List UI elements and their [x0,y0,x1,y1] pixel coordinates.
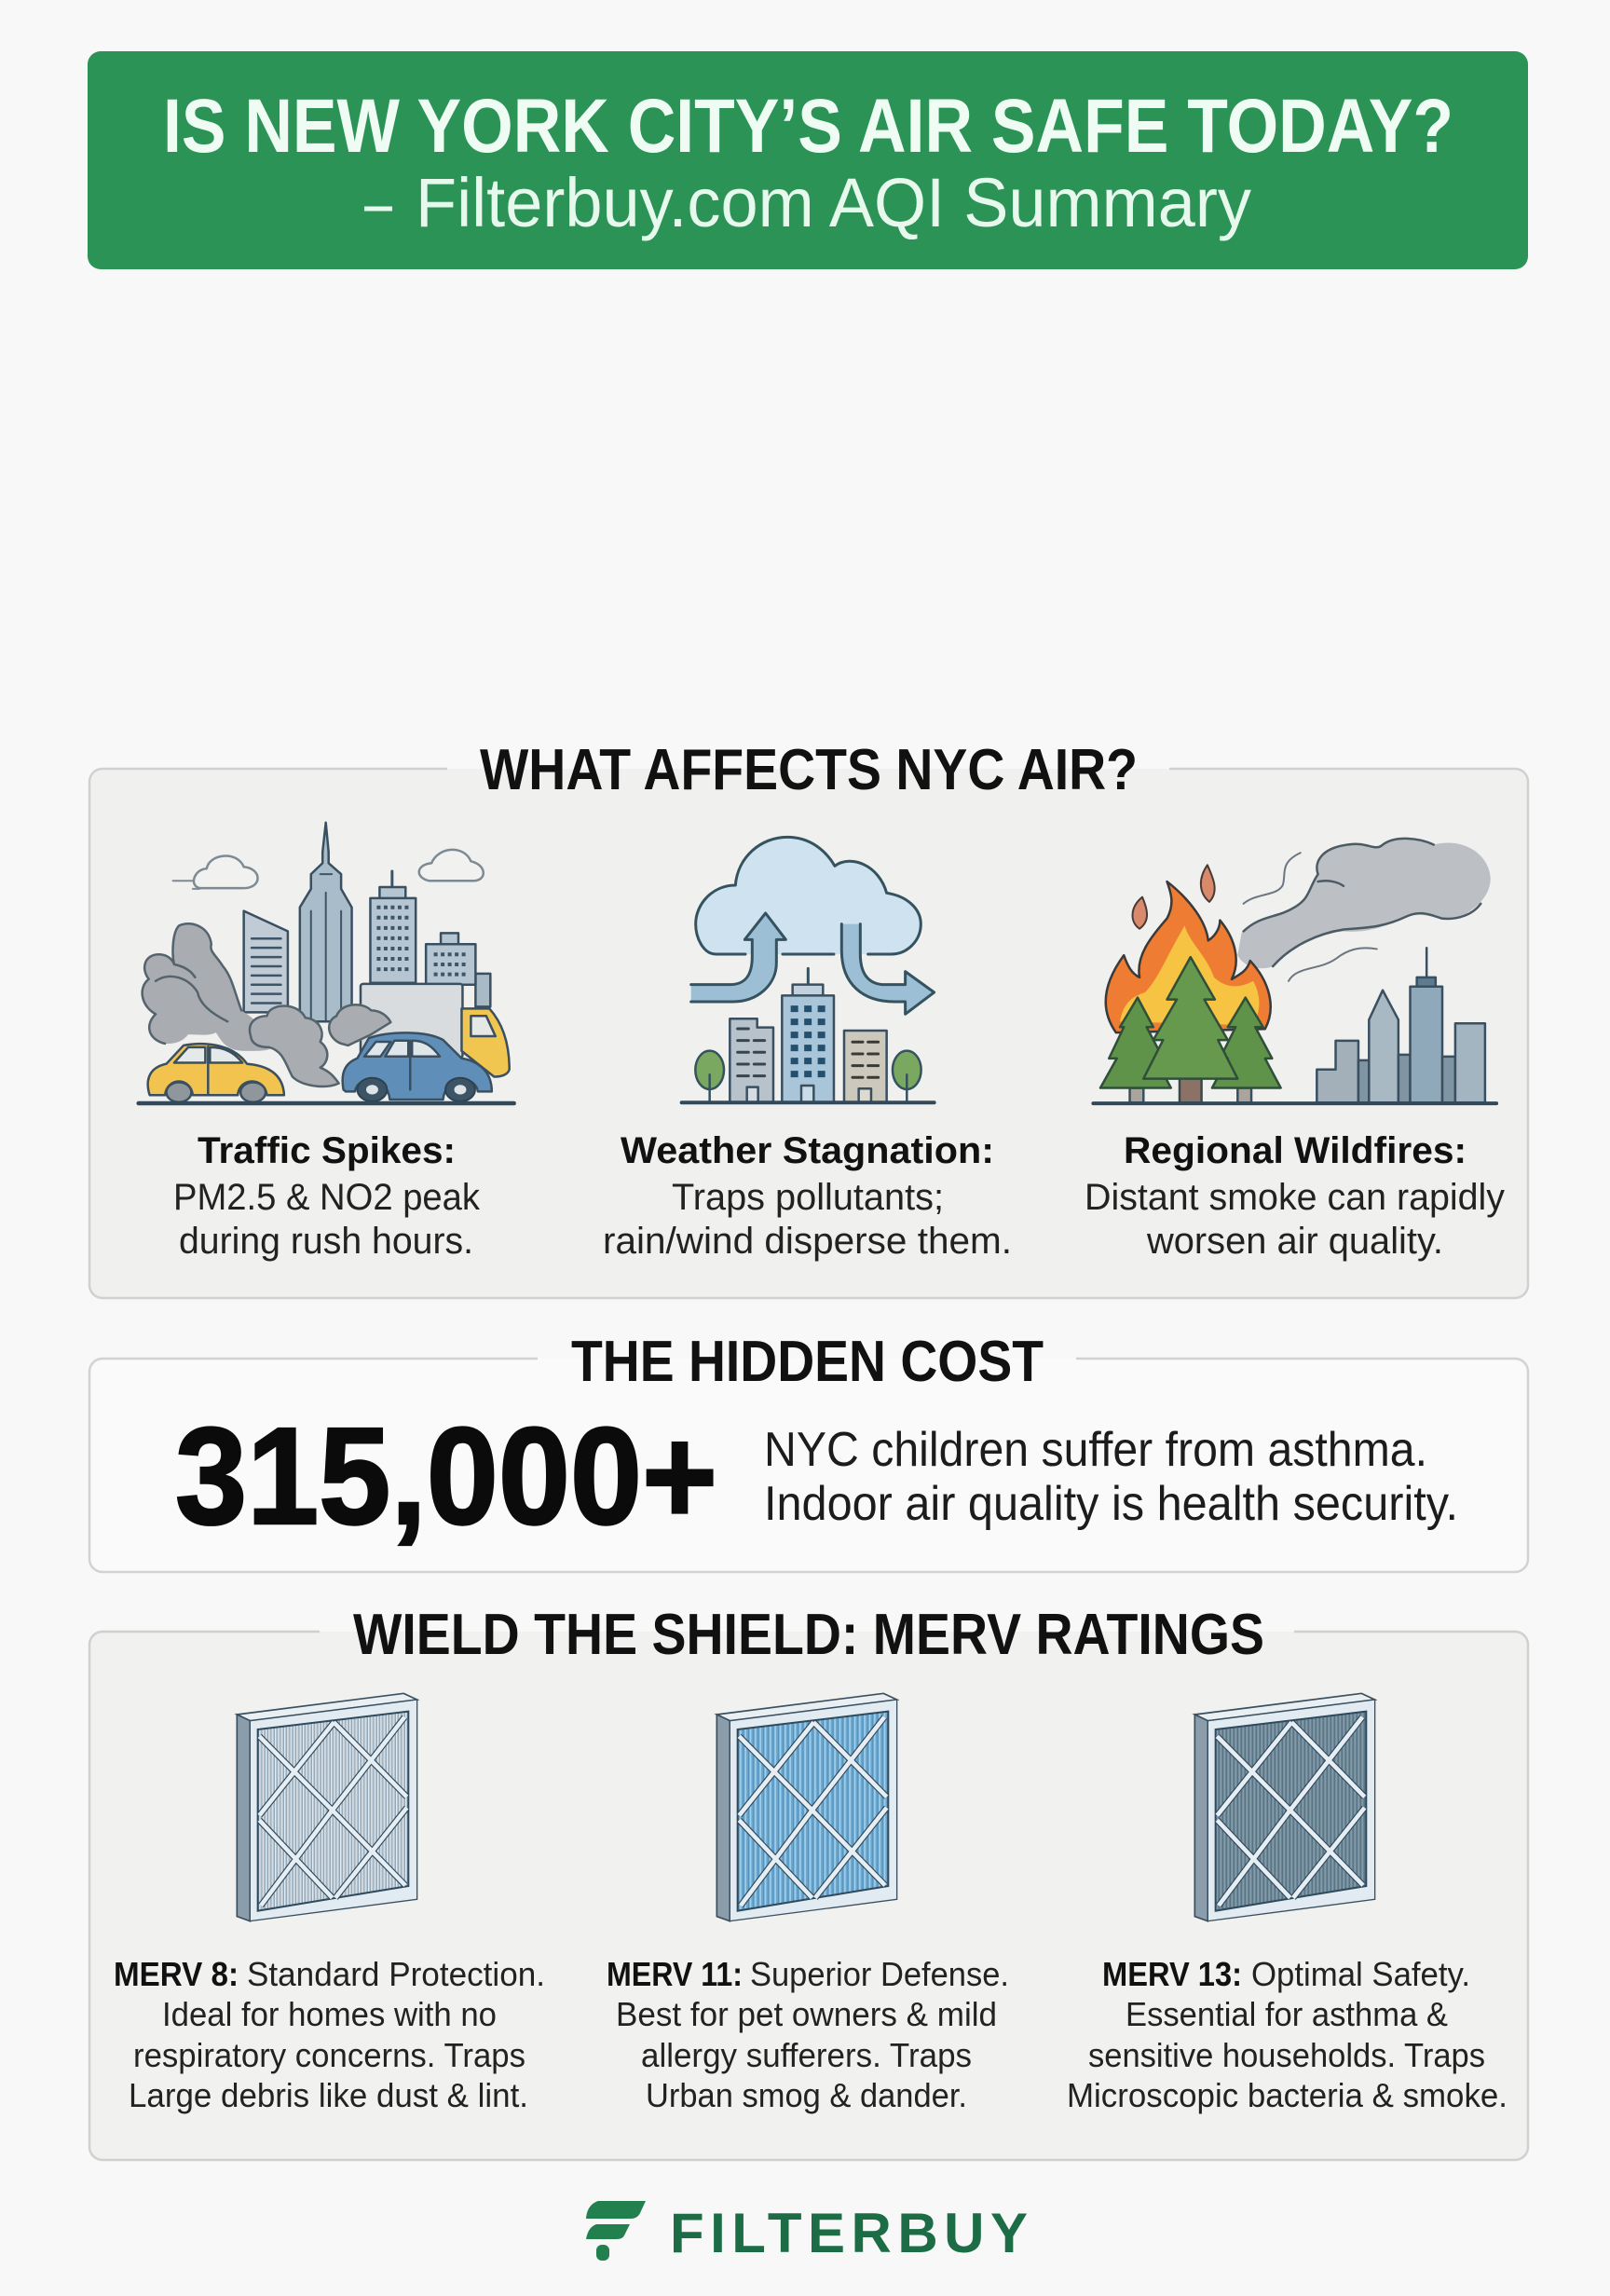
text: regional wildfires: worsen air quality. [1146,1221,1443,1262]
text: regional wildfires: Distant smoke can rapidly [1085,1177,1505,1218]
left building [244,911,288,1012]
truck [361,984,462,1058]
text: MERV 11: MERV 11: [607,1955,743,1993]
text: MERV 13: Optimal Safety. [1251,1955,1470,1993]
header banner [88,51,1528,269]
asthma statement: NYC children suffer from asthma. [764,1423,1427,1477]
arrow: dispersing air [841,924,935,1014]
text: MERV 8 [114,1955,545,2114]
text: MERV 13: MERV 13: [1102,1955,1242,1993]
panel: MERV ratings [89,1603,1528,2160]
text: MERV 8: respiratory concerns. Traps [133,2036,525,2074]
icon: MERV 13 filter [1194,1693,1375,1921]
icon: weather stagnation [682,837,935,1102]
smoke left [143,923,272,1051]
text: MERV 13 [1067,1955,1508,2114]
logo: Filterbuy [586,2201,1028,2264]
trees [1130,1087,1251,1102]
wordmark: FILTERBUY [670,2202,1028,2264]
flame [1106,882,1271,1032]
text: MERV 11: allergy sufferers. Traps [641,2036,972,2074]
text: traffic spikes: Traffic Spikes: [198,1130,456,1171]
heading: wield the shield: WIELD THE SHIELD: MERV RATINGS [353,1603,1264,1667]
tower [390,871,393,887]
trees [695,1051,724,1089]
text: MERV 8: Standard Protection. [247,1955,545,1993]
arrow: rising air [691,913,785,1002]
text: MERV 11: Best for pet owners & mild [616,1995,997,2033]
embers [1133,897,1147,929]
text: MERV 13: sensitive households. Traps [1088,2036,1485,2074]
text: traffic spikes: PM2.5 & NO2 peak [173,1177,481,1218]
smoke right [329,1004,390,1046]
right building [475,974,490,1006]
text: regional wildfires [1085,1130,1505,1262]
text: weather stagnation: Traps pollutants; [672,1177,944,1218]
taxi [148,1044,284,1095]
big number: 315,000+ [175,1400,717,1553]
text: weather stagnation [603,1130,1012,1262]
blue car [343,1032,492,1100]
text: MERV 8: Large debris like dust & lint. [129,2076,528,2114]
text: MERV 11: Superior Defense. [750,1955,1009,1993]
text: MERV 8: MERV 8: [114,1955,239,1993]
icon: traffic and city skyline [139,823,514,1103]
smoke plume [1237,839,1491,968]
icon: regional wildfire [1093,839,1496,1103]
text: weather stagnation: Weather Stagnation: [621,1130,994,1171]
icon: Filterbuy mark [586,2201,646,2261]
icon: MERV 8 filter [237,1693,417,1921]
smoke middle [250,1005,339,1086]
right building [844,1031,887,1102]
asthma statement [764,1423,1458,1531]
text: traffic spikes: during rush hours. [179,1221,473,1262]
text: regional wildfires: Regional Wildfires: [1124,1130,1467,1171]
heading: what affects NYC air: WHAT AFFECTS NYC AIR? [480,738,1138,802]
subtitle: – [364,164,393,241]
subtitle: Filterbuy.com AQI Summary [416,164,1251,241]
text: MERV 13: Essential for asthma & [1126,1995,1448,2033]
asthma statement: Indoor air quality is health security. [764,1477,1458,1531]
text: traffic spikes [173,1130,481,1262]
text: MERV 11: Urban smog & dander. [646,2076,967,2114]
skyline [1317,1041,1358,1102]
panel: what affects NYC air [89,738,1528,1298]
text: MERV 11 [607,1955,1009,2114]
center building [807,968,810,985]
icon: MERV 11 filter [716,1693,897,1921]
panel: the hidden cost [89,1330,1528,1572]
text: MERV 13: Microscopic bacteria & smoke. [1067,2076,1508,2114]
left building [730,1018,773,1102]
text: MERV 8: Ideal for homes with no [162,1995,497,2033]
skyscraper [300,823,352,1021]
heading: the hidden cost: THE HIDDEN COST [571,1330,1044,1394]
title: IS NEW YORK CITY’S AIR SAFE TODAY? [163,84,1453,169]
text: weather stagnation: rain/wind disperse them. [603,1221,1012,1262]
